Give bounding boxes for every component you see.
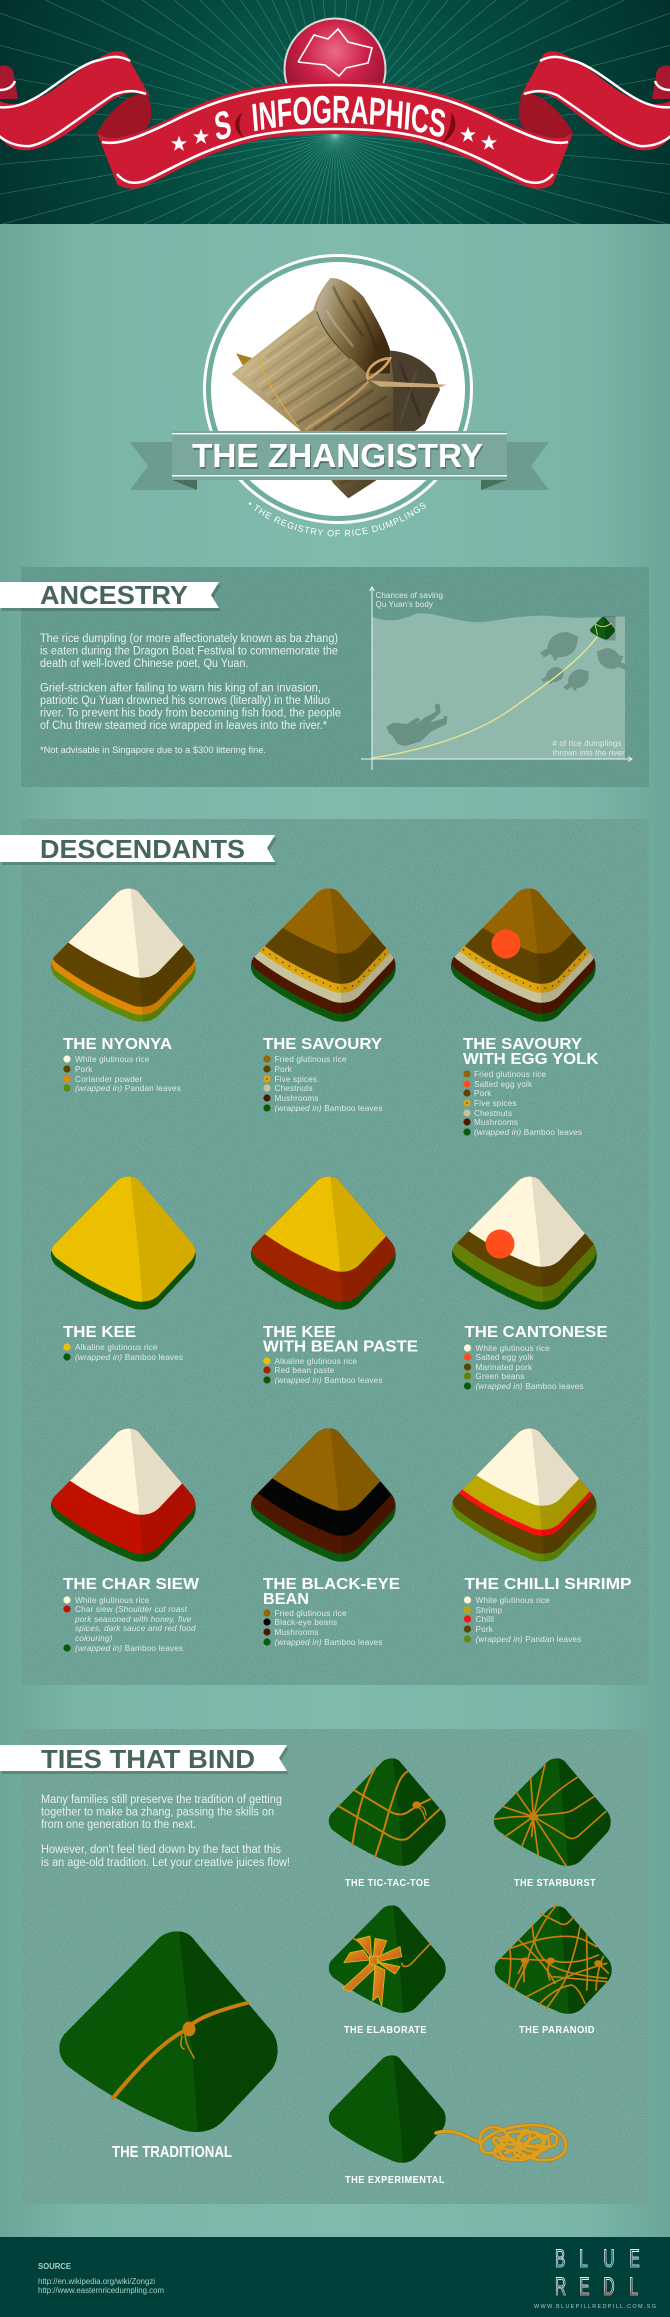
- legend: Green beans: [476, 1372, 524, 1381]
- dumpling: kee with bean paste: [250, 1176, 396, 1310]
- ribbon: left side curl: [0, 51, 151, 150]
- legend: colouring): [75, 1634, 113, 1643]
- heading: descendants: [0, 834, 277, 865]
- legend: Mushrooms: [474, 1118, 518, 1127]
- text: ancestry story: *Not advisable in Singapore due to a $300 littering fine.: [40, 745, 266, 756]
- panel: ancestry: [0, 567, 649, 787]
- dumpling: savoury with egg yolk: [450, 888, 596, 1022]
- legend: (wrapped in) Pandan leaves: [75, 1084, 181, 1093]
- dumpling: the elaborate: [329, 1902, 449, 2036]
- logo: blue red pill: [534, 2245, 656, 2310]
- label: THE TIC-TAC-TOE: [345, 1878, 430, 1889]
- legend: [263, 1055, 383, 1113]
- legend: White glutinous rice: [476, 1596, 550, 1605]
- icon: fish school: [540, 632, 630, 693]
- legend: Chilli: [476, 1615, 494, 1624]
- chart: chances of saving qu yuan: [361, 587, 632, 770]
- dumpling: nyonya: [50, 888, 196, 1022]
- legend: White glutinous rice: [476, 1344, 550, 1353]
- title: THE SAVOURY: [263, 1036, 382, 1053]
- legend: (wrapped in) Bamboo leaves: [474, 1128, 582, 1137]
- legend: Pork: [274, 1065, 293, 1074]
- ribbon brackets: [235, 112, 455, 143]
- ribbon title: s infographics: INFOGRAPHICS: [252, 96, 446, 137]
- text: ties intro: However, don't feel tied down by the fact that this: [41, 1844, 281, 1856]
- legend: Char siew (Shoulder cut roast: [75, 1605, 188, 1614]
- icon: qu yuan sinking: [387, 703, 447, 746]
- card: the kee with bean paste: [250, 1176, 418, 1384]
- ribbon: right side curl: [519, 51, 670, 150]
- heading: descendants: DESCENDANTS: [40, 834, 245, 864]
- legend: (wrapped in) Pandan leaves: [476, 1635, 581, 1644]
- legend: pork seasoned with honey, five: [74, 1615, 192, 1624]
- legend: (wrapped in) Bamboo leaves: [274, 1104, 383, 1113]
- subtitle arc text: • THE REGISTRY OF RICE DUMPLINGS •: [248, 502, 426, 536]
- text: ancestry story: [40, 633, 341, 756]
- hero: dumpling photo: [232, 278, 447, 498]
- title: [263, 1576, 400, 1608]
- text: ties intro: [41, 1794, 290, 1869]
- card: the kee: [51, 1168, 200, 1362]
- logo: blue red pill: WWW.BLUEPILLREDPILL.COM.SG: [534, 2304, 656, 2310]
- legend: Pork: [476, 1625, 494, 1634]
- dumpling: the traditional: [59, 1924, 284, 2161]
- dumpling: chilli shrimp: [452, 1428, 597, 1562]
- legend: [463, 1070, 582, 1137]
- title: THE CHAR SIEW: [63, 1576, 200, 1593]
- dumpling: the starburst: [493, 1755, 614, 1889]
- paranoid strings: [500, 1905, 608, 2008]
- title: THE NYONYA: [63, 1036, 172, 1053]
- card: the char siew: [50, 1428, 199, 1652]
- string tangle: [436, 2125, 566, 2160]
- legend: Pork: [75, 1065, 93, 1074]
- legend: [464, 1596, 581, 1644]
- card: the savoury with egg yolk: [450, 888, 598, 1136]
- card: the black-eye bean: [250, 1428, 400, 1646]
- legend: [63, 1055, 181, 1093]
- source heading: SOURCE: [38, 2262, 72, 2271]
- label: THE PARANOID: [519, 2025, 595, 2036]
- bow with ribbon: [343, 1936, 430, 2006]
- starburst strings: [493, 1764, 606, 1866]
- legend: Five spices: [274, 1075, 317, 1084]
- title: WITH EGG YOLK: [463, 1051, 599, 1068]
- dumpling: char siew: [50, 1428, 196, 1562]
- text: ancestry story: of Chu threw steamed rice wrapped in leaves into the river.*: [40, 720, 327, 732]
- ribbon title: s infographics: [215, 96, 446, 140]
- legend: Fried glutinous rice: [274, 1609, 347, 1618]
- dumpling: the paranoid: [495, 1903, 615, 2036]
- legend: Chestnuts: [474, 1109, 512, 1118]
- legend: Five spices: [474, 1099, 517, 1108]
- dumpling: kee: [50, 1176, 196, 1310]
- legend: (wrapped in) Bamboo leaves: [476, 1382, 584, 1391]
- label: THE EXPERIMENTAL: [345, 2175, 445, 2186]
- legend: White glutinous rice: [75, 1596, 150, 1605]
- legend: Mushrooms: [274, 1628, 319, 1637]
- legend: Fried glutinous rice: [274, 1055, 347, 1064]
- dumpling: black-eye bean: [250, 1428, 396, 1562]
- heading: ties that bind: TIES THAT BIND: [41, 1744, 255, 1774]
- tic-tac-toe strings: [338, 1768, 439, 1857]
- legend: Salted egg yolk: [474, 1080, 533, 1089]
- legend: Pork: [474, 1089, 492, 1098]
- text: ancestry story: death of well-loved Chinese poet, Qu Yuan.: [40, 658, 248, 670]
- icon: small dumpling: [590, 616, 615, 640]
- legend: (wrapped in) Bamboo leaves: [274, 1376, 383, 1385]
- legend: Alkaline glutinous rice: [274, 1357, 357, 1366]
- title: [463, 1036, 599, 1068]
- legend: Chestnuts: [274, 1084, 313, 1093]
- legend: Fried glutinous rice: [474, 1070, 546, 1079]
- legend: [263, 1609, 383, 1647]
- text: ancestry story: is eaten during the Dragon Boat Festival to commemorate the: [40, 646, 338, 658]
- source links: [38, 2277, 164, 2295]
- ribbon stars: [171, 127, 497, 151]
- heading: ancestry: [0, 580, 221, 611]
- legend: Red bean paste: [274, 1366, 335, 1375]
- x axis label: # of rice dumplings: [552, 739, 622, 748]
- label: THE TRADITIONAL: [112, 2144, 232, 2161]
- text: ties intro: together to make ba zhang, passing the skills on: [41, 1806, 274, 1818]
- dumpling: savoury: [250, 888, 396, 1022]
- card: the nyonya: [50, 888, 196, 1092]
- dumpling: cantonese: [452, 1176, 597, 1310]
- legend: [263, 1357, 383, 1385]
- text: ancestry story: The rice dumpling (or more affectionately known as ba zhang): [40, 633, 338, 645]
- logo: blue red pill: REDL: [555, 2273, 638, 2301]
- ribbon: main band: [97, 81, 573, 189]
- footer: [0, 2237, 670, 2317]
- title: THE BLACK-EYE: [263, 1576, 400, 1593]
- source links: http://www.easternricedumpling.com: [38, 2286, 164, 2295]
- legend: [464, 1344, 584, 1391]
- label: THE ELABORATE: [344, 2025, 427, 2036]
- title: THE CANTONESE: [464, 1324, 608, 1341]
- source links: http://en.wikipedia.org/wiki/Zongzi: [38, 2277, 155, 2286]
- panel: ties that bind: [0, 1729, 649, 2204]
- panel: descendants: [0, 819, 649, 1685]
- traditional string and knot: [113, 2003, 247, 2098]
- legend: Black-eye beans: [274, 1618, 337, 1627]
- legend: Marinated pork: [476, 1363, 533, 1372]
- title: [263, 1324, 418, 1356]
- logo: blue red pill: BLUE: [555, 2245, 640, 2273]
- legend: White glutinous rice: [75, 1055, 150, 1064]
- legend: Shrimp: [476, 1606, 503, 1615]
- heading: ancestry: ANCESTRY: [40, 580, 188, 610]
- ribbon title: s infographics: S: [215, 111, 231, 140]
- legend: Salted egg yolk: [476, 1353, 534, 1362]
- card: the cantonese: [452, 1176, 607, 1390]
- text: ties intro: Many families still preserve the tradition of getting: [41, 1794, 282, 1806]
- title: THE SAVOURY: [463, 1036, 582, 1053]
- text: ancestry story: Grief-stricken after failing to warn his king of an invasion,: [40, 682, 321, 694]
- y axis label: Qu Yuan's body: [376, 600, 433, 609]
- title: WITH BEAN PASTE: [263, 1338, 418, 1356]
- legend: spices, dark sauce and red food: [75, 1624, 196, 1633]
- title: THE CHILLI SHRIMP: [464, 1576, 632, 1593]
- card: the savoury: [250, 888, 396, 1112]
- x axis label: thrown into the river: [552, 748, 625, 757]
- text: ancestry story: river. To prevent his body from becoming fish food, the people: [40, 708, 341, 720]
- legend: (wrapped in) Bamboo leaves: [75, 1644, 183, 1653]
- title banner: the zhangistry: THE ZHANGISTRY: [192, 437, 483, 474]
- dumpling: the experimental: [329, 2052, 566, 2186]
- dumpling: the tic-tac-toe: [329, 1755, 449, 1889]
- legend: Coriander powder: [75, 1075, 143, 1084]
- title: THE KEE: [263, 1324, 336, 1341]
- curve line: [372, 637, 597, 758]
- text: ties intro: is an age-old tradition. Let your creative juices flow!: [41, 1857, 290, 1869]
- legend: (wrapped in) Bamboo leaves: [274, 1638, 383, 1647]
- label: THE STARBURST: [514, 1878, 596, 1889]
- icon: red ball with singapore outline: [284, 18, 386, 84]
- legend: Alkaline glutinous rice: [75, 1343, 158, 1352]
- legend: Mushrooms: [274, 1094, 319, 1103]
- hero: circle badge: [203, 254, 473, 524]
- title: BEAN: [263, 1591, 309, 1608]
- header banner: [0, 0, 670, 224]
- legend: [63, 1343, 183, 1362]
- legend: [63, 1596, 196, 1653]
- text: ancestry story: patriotic Qu Yuan drowned his sorrows (literally) in the Miluo: [40, 695, 330, 707]
- title: THE KEE: [63, 1324, 136, 1341]
- title banner: the zhangistry: [130, 431, 549, 490]
- text: ties intro: from one generation to the next.: [41, 1819, 196, 1831]
- chart axes: [361, 587, 632, 770]
- card: the chilli shrimp: [452, 1428, 631, 1644]
- y axis label: Chances of saving: [376, 591, 443, 600]
- legend: (wrapped in) Bamboo leaves: [75, 1353, 183, 1362]
